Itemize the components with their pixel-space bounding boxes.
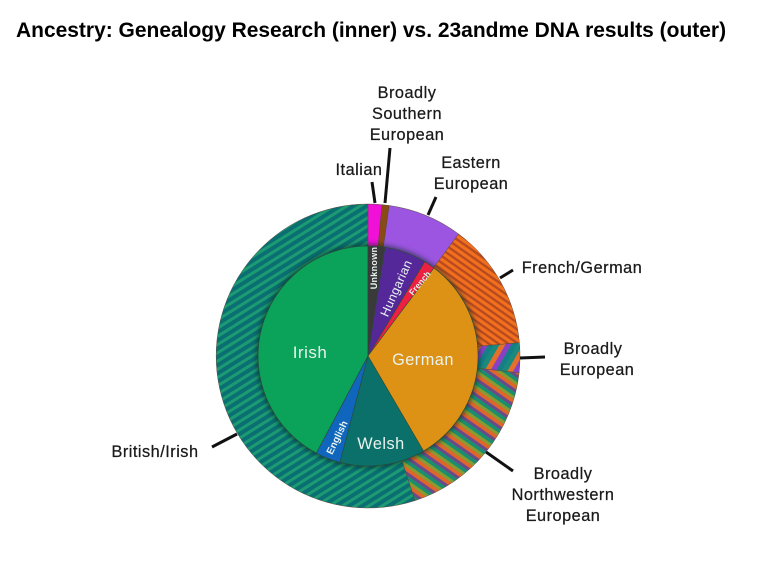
label: French: French <box>407 269 433 297</box>
label: Broadly European: Broadly <box>564 340 623 358</box>
label: Broadly Northwestern European: Northwestern <box>512 486 614 504</box>
label: Welsh: Welsh <box>357 435 405 453</box>
segment: British/Irish <box>216 204 415 508</box>
leader: French/German <box>500 270 513 278</box>
outer ring: 23andme DNA results <box>216 204 520 508</box>
segment: Italian <box>368 204 382 356</box>
segment: Eastern European <box>368 206 459 356</box>
leader: British/Irish <box>212 434 237 447</box>
title: Ancestry: Genealogy Research (inner) vs. 23andme DNA results (outer) <box>16 19 726 42</box>
label: Broadly Northwestern European: European <box>526 507 600 525</box>
leader: Broadly Northwestern European <box>486 452 513 471</box>
label: English: English <box>325 419 351 457</box>
label: Italian: Italian <box>336 161 382 179</box>
leader: Broadly European <box>520 357 545 358</box>
segment: Broadly Southern European <box>368 205 389 356</box>
segment: Broadly European <box>368 343 520 373</box>
inner pie shadow <box>256 244 480 468</box>
segment: Broadly Northwestern European <box>368 356 519 501</box>
segment: Irish <box>258 246 368 453</box>
segment: English <box>316 356 368 462</box>
segment: Unknown <box>368 246 385 356</box>
leader: Broadly Southern European <box>385 148 390 203</box>
outer labels <box>111 84 642 525</box>
label: Broadly Southern European: Southern <box>372 105 442 123</box>
inner labels <box>293 247 454 457</box>
segment: German <box>368 268 478 451</box>
label: German: German <box>392 351 454 369</box>
label: British/Irish: British/Irish <box>111 443 199 461</box>
label: Hungarian: Hungarian <box>378 258 415 319</box>
label: Eastern European: European <box>434 175 508 193</box>
segment: French <box>368 262 434 356</box>
inner pie: genealogy research <box>258 246 478 466</box>
label: Irish: Irish <box>293 343 327 362</box>
segment: Hungarian <box>368 247 425 356</box>
label: Broadly Northwestern European: Broadly <box>534 465 593 483</box>
leader: Eastern European <box>428 197 436 215</box>
label: Unknown: Unknown <box>369 247 379 289</box>
segment: French/German <box>368 234 519 356</box>
label: Broadly Southern European: European <box>370 126 444 144</box>
label: Eastern European: Eastern <box>441 154 501 172</box>
label: French/German: French/German <box>522 259 642 277</box>
label: Broadly Southern European: Broadly <box>378 84 437 102</box>
label: Broadly European: European <box>560 361 634 379</box>
leader lines <box>212 148 545 471</box>
leader: Italian <box>372 182 375 203</box>
segment: Welsh <box>340 356 424 466</box>
